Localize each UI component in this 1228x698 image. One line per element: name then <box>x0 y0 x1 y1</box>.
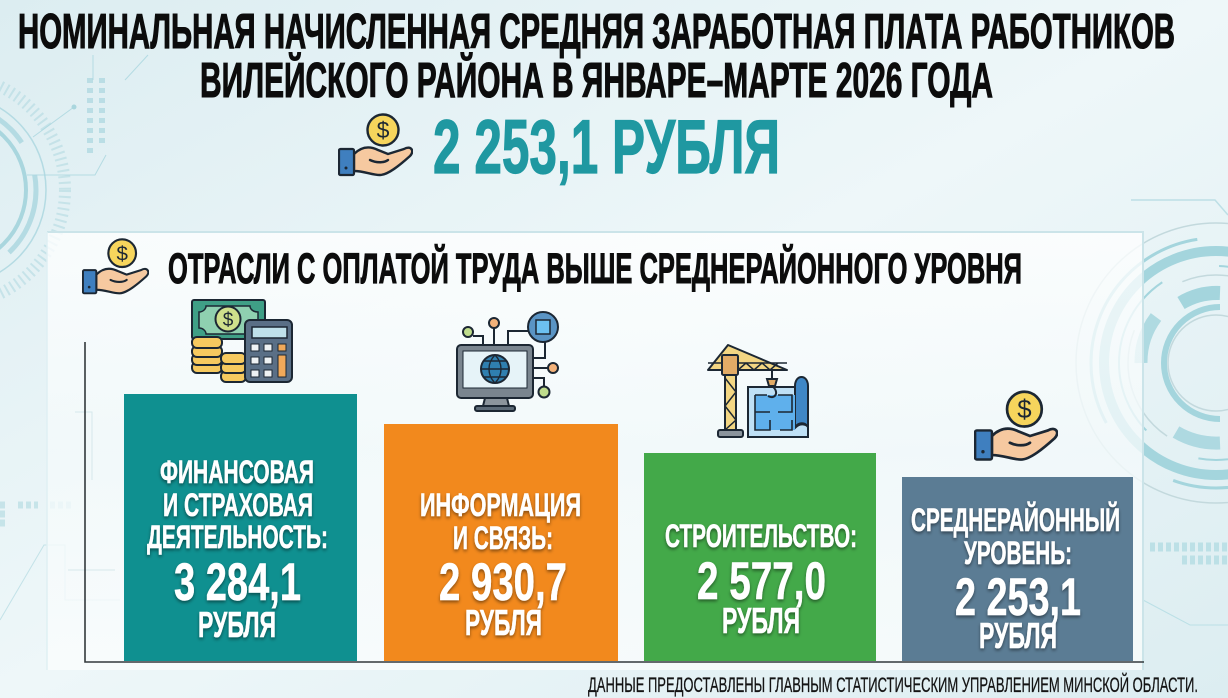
bar: construction <box>644 453 876 661</box>
bar: district average: СРЕДНЕРАЙОННЫЙ <box>911 502 1120 538</box>
bar: finance <box>124 394 357 661</box>
bar: district average: УРОВЕНЬ: <box>964 535 1072 571</box>
headline value: 2 253,1 РУБЛЯ <box>433 105 780 190</box>
bar: information: ИНФОРМАЦИЯ <box>420 487 581 523</box>
bar: information: 2 930,7 <box>439 553 567 612</box>
bar: finance: ДЕЯТЕЛЬНОСТЬ: <box>147 519 328 555</box>
icon: hand with coin (subtitle) <box>83 239 148 293</box>
panel: industries chart <box>47 232 1143 670</box>
title <box>18 5 1175 108</box>
icon: money and calculator <box>192 300 292 382</box>
bar: information: РУБЛЯ <box>465 602 542 643</box>
bar: finance: 3 284,1 <box>174 553 301 612</box>
bar: construction: РУБЛЯ <box>722 600 800 641</box>
chart axes <box>85 342 1144 662</box>
icon: hand with coin (headline) <box>339 114 412 175</box>
bar: finance: ФИНАНСОВАЯ <box>160 454 314 490</box>
decoration: right tech circles <box>1076 223 1228 625</box>
bar: information <box>384 424 618 661</box>
bar: information: И СВЯЗЬ: <box>453 520 553 556</box>
icon: hand with coin (average) <box>975 392 1057 460</box>
bar: finance: РУБЛЯ <box>198 604 276 645</box>
bar: district average: РУБЛЯ <box>979 615 1057 656</box>
bar: district average <box>902 477 1133 661</box>
bar: district average: 2 253,1 <box>955 568 1081 627</box>
bar: construction: СТРОИТЕЛЬСТВО: <box>665 518 857 554</box>
bar: finance: И СТРАХОВАЯ <box>163 487 313 523</box>
icon: computer with network <box>457 312 558 411</box>
icon: money and calculator: $ <box>223 310 234 331</box>
icon: crane and blueprint <box>708 345 808 437</box>
bar: construction: 2 577,0 <box>697 552 826 611</box>
